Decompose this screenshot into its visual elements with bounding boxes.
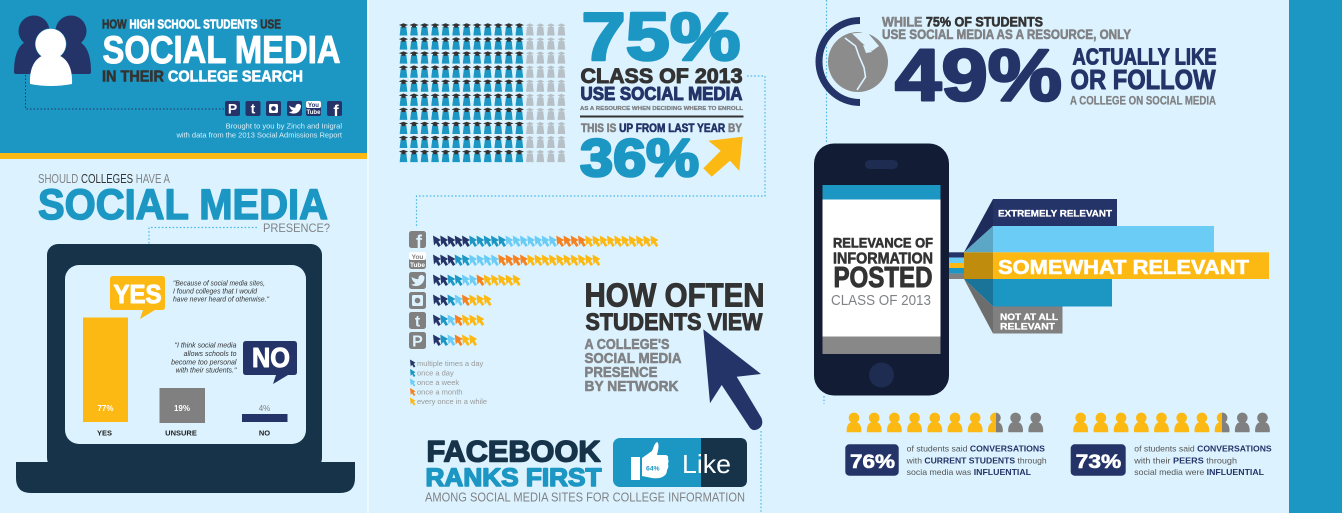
icon: like button: 64% [646,466,660,472]
title [102,16,340,86]
chart: relevance ribbons: EXTREMELY RELEVANT [998,209,1112,220]
callout: no [243,341,297,384]
heading: how often students view: PRESENCE [584,364,658,381]
chart: relevance ribbons: RELEVANT [1000,322,1056,332]
stat: 73 percent peers [1071,413,1272,477]
cursor row: youtube [433,254,600,266]
icon: like button: Like [682,449,731,479]
stat: 76 percent current students [845,413,1047,477]
badge: 73 percent [1071,444,1126,476]
callout: no: NO [252,342,290,373]
icon: smartphone [814,144,949,396]
icon: students group [14,16,91,86]
stat: 75 percent class of 2013: 36% [580,129,699,188]
network icons: P [412,334,423,350]
text: 76 percent description: with CURRENT STUDENTS through [906,455,1047,465]
text: 76 percent description: socia media was INFLUENTIAL [907,467,1031,477]
text: no quote: with their students." [176,368,237,374]
text: relevance of information posted [831,235,933,309]
title: IN THEIR COLLEGE SEARCH [102,68,303,86]
bar chart: NO [259,428,270,438]
cursor row: facebook [433,236,658,247]
stat: 49 percent: OR FOLLOW [1070,64,1216,95]
network icons [409,231,426,350]
network icons: f [416,232,423,252]
stat: facebook ranks first: RANKS FIRST [426,464,602,492]
badge: 73 percent: 73% [1076,452,1121,473]
text: 73 percent description: with their PEERS through [1133,455,1237,465]
cursor row: twitter [433,274,521,286]
icon: laptop [16,244,355,493]
legend: every once in a while [417,397,487,406]
heading: how often students view: HOW OFTEN [584,276,764,314]
chart: how often students view by network [409,231,658,406]
credit text [175,122,343,140]
right edge band [1289,0,1342,513]
legend: once a week [417,378,459,387]
stat: 49 percent: 49% [895,36,1062,116]
bar chart: YES [97,428,112,438]
heading: should colleges have a social media presence: SOCIAL MEDIA [38,181,328,229]
stat: 75 percent class of 2013: 75% [582,0,740,75]
stat: 49 percent: A COLLEGE ON SOCIAL MEDIA [1070,96,1216,108]
legend [410,359,487,406]
text: 73 percent description: social media were INFLUENTIAL [1134,467,1264,477]
heading: should colleges have a social media presence: SHOULD COLLEGES HAVE A [38,172,171,186]
stat: 75 percent class of 2013: USE SOCIAL MEDIA [580,84,743,104]
title: HOW HIGH SCHOOL STUDENTS USE [102,16,281,32]
social icons: f [333,103,339,120]
text: 73 percent description [1133,444,1272,477]
social icons [225,100,342,120]
panel: header [0,0,367,159]
pictogram: 73 percent people [1073,413,1270,432]
stat: 49 percent: WHILE 75% OF STUDENTS [882,14,1043,30]
text: relevance of information posted: CLASS OF 2013 [831,292,931,309]
chart: relevance ribbons [949,199,1269,334]
panel: laptop chart [16,244,355,493]
legend: multiple times a day [417,359,484,368]
bar chart: 4% [259,404,270,413]
heading: how often students view [584,276,764,395]
legend: once a month [417,388,462,396]
stat: 49 percent: ACTUALLY LIKE [1072,44,1216,70]
arrow: up [703,137,743,177]
text: yes quote [173,280,269,304]
heading: how often students view: SOCIAL MEDIA [584,350,682,367]
text: relevance of information posted: POSTED [834,262,932,294]
network icons: Tube [410,262,425,269]
stat: 49 percent: USE SOCIAL MEDIA AS A RESOURCE, ONLY [882,27,1131,42]
stat: 75 percent class of 2013 [580,0,744,188]
stat: facebook ranks first [425,436,745,504]
bar chart: 77% [97,404,114,413]
title: SOCIAL MEDIA [102,29,340,72]
social icons: t [251,100,256,116]
text: 76 percent description: of students said CONVERSATIONS [907,444,1045,454]
icon: big cursor [703,329,762,430]
bar chart [83,318,288,438]
heading: how often students view: STUDENTS VIEW [586,309,763,336]
legend: once a day [417,368,454,378]
bar chart: UNSURE [165,428,197,438]
badge: 76 percent [845,444,899,476]
heading: how often students view: BY NETWORK [584,378,679,395]
social icons: You [308,103,319,109]
social icons: P [228,100,237,116]
pictogram: 75 percent of students [399,23,565,162]
icon: globe [819,20,888,102]
stat: 75 percent class of 2013: AS A RESOURCE WHEN DECIDING WHERE TO ENROLL [580,106,743,112]
credit text: with data from the 2013 Social Admissions Report [175,130,343,140]
text: no quote: become too personal [171,360,237,366]
text: 73 percent description: of students said CONVERSATIONS [1134,444,1272,454]
text: relevance of information posted: INFORMATION [833,250,933,267]
stat: 75 percent class of 2013: CLASS OF 2013 [580,64,743,88]
stat: 75 percent class of 2013: THIS IS UP FROM LAST YEAR BY [581,123,742,135]
text: no quote [171,342,237,374]
text: yes quote: I found colleges that I would [173,288,258,296]
heading: how often students view: A COLLEGE'S [584,336,670,353]
stat: facebook ranks first: AMONG SOCIAL MEDIA SITES FOR COLLEGE INFORMATION [425,490,745,504]
text: no quote: "I think social media [174,342,237,350]
badge: 76 percent: 76% [850,452,895,473]
callout: yes [110,276,165,319]
stat: 49 percent [882,14,1216,116]
pictogram: 76 percent people [847,413,1043,432]
stat: facebook ranks first: FACEBOOK [426,436,601,468]
bar chart: 19% [174,404,190,413]
network icons: You [412,254,423,261]
network icons: t [415,314,421,330]
cursor row: instagram [433,294,492,306]
text: no quote: allows schools to [184,351,237,358]
text: yes quote: "Because of social media sites, [173,280,265,288]
social icons: Tube [307,110,321,116]
chart: relevance ribbons: NOT AT ALL [1000,312,1059,322]
text: 76 percent description [906,444,1047,477]
icon: like button [613,438,747,487]
cursor row: pinterest [433,334,477,346]
heading: should colleges have a social media presence: PRESENCE? [263,221,330,235]
callout: yes: YES [114,279,162,309]
credit text: Brought to you by Zinch and Inigral [226,122,342,130]
chart: relevance ribbons: SOMEWHAT RELEVANT [998,257,1249,279]
cursor row: tumblr [433,314,484,326]
text: yes quote: have never heard of otherwise." [173,296,269,304]
text: relevance of information posted: RELEVANCE OF [833,235,933,251]
